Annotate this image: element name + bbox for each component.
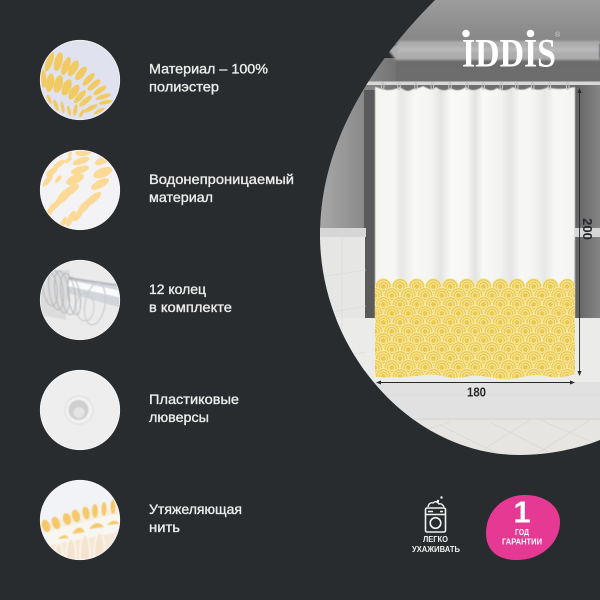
label: grommets text bbox=[149, 391, 239, 425]
icon ring bbox=[40, 370, 120, 450]
label: waterproof text: Водонепроницаемый bbox=[149, 171, 294, 187]
badge: 1 year warranty bbox=[486, 494, 560, 560]
registered mark: ® bbox=[555, 31, 561, 39]
label: easy care text: УХАЖИВАТЬ bbox=[412, 544, 460, 554]
label: material text bbox=[149, 60, 268, 94]
left wall bbox=[320, 58, 396, 240]
warranty number: 1 bbox=[513, 494, 531, 530]
photo: bathroom with curtain bbox=[320, 0, 600, 459]
logo dot bbox=[527, 30, 534, 37]
icon: plastic grommet bbox=[40, 370, 120, 450]
curtain rings bbox=[381, 82, 569, 90]
dimension: height 200: 200 bbox=[580, 218, 595, 240]
warranty text: ГАРАНТИИ bbox=[502, 538, 542, 546]
label: rings text: 12 колец bbox=[149, 281, 206, 297]
feature: material bbox=[40, 40, 268, 120]
dimension: width 180 bbox=[376, 380, 575, 400]
right wall bbox=[575, 85, 600, 318]
icon: wet fabric close-up bbox=[40, 149, 120, 230]
pink blob bbox=[486, 495, 560, 560]
middle wall bbox=[395, 58, 600, 240]
label: grommets text: Пластиковые bbox=[149, 391, 239, 407]
icon ring bbox=[40, 40, 120, 120]
feature: rings bbox=[40, 260, 232, 340]
feature: grommets bbox=[40, 370, 239, 450]
label: material text: Материал – 100% bbox=[149, 60, 268, 76]
logo dot bbox=[462, 30, 470, 37]
label: weighted thread text bbox=[149, 501, 242, 535]
dimension: height 200 bbox=[578, 88, 595, 376]
warranty text bbox=[502, 528, 542, 546]
left alcove shadow bbox=[364, 90, 376, 322]
label: waterproof text bbox=[149, 171, 294, 205]
icon ring bbox=[40, 480, 120, 560]
icon: washing machine bbox=[426, 496, 446, 532]
curtain rod bbox=[366, 82, 600, 85]
icon ring bbox=[40, 260, 120, 340]
warranty text: ГОД bbox=[515, 528, 529, 537]
icon: weighted hem bbox=[40, 480, 120, 560]
badge: easy care bbox=[412, 496, 460, 554]
label: rings text: в комплекте bbox=[149, 299, 232, 315]
logo: IDDIS: IDDIS bbox=[462, 30, 556, 76]
feature: waterproof bbox=[40, 149, 294, 230]
icon: yellow petals close-up bbox=[40, 40, 120, 120]
upper wall bbox=[396, 0, 600, 44]
curtain scallop pattern bbox=[375, 276, 575, 382]
label: weighted thread text: Утяжеляющая bbox=[149, 501, 242, 517]
crown molding bbox=[388, 41, 600, 60]
label: material text: полиэстер bbox=[149, 78, 219, 94]
label: waterproof text: материал bbox=[149, 189, 213, 205]
dimension: width 180: 180 bbox=[467, 384, 486, 400]
floor bbox=[412, 418, 600, 455]
label: grommets text: люверсы bbox=[149, 409, 209, 425]
curtain fabric bbox=[374, 86, 576, 318]
icon: rings on rod bbox=[40, 260, 122, 340]
label: weighted thread text: нить bbox=[149, 519, 180, 535]
label: easy care text bbox=[412, 534, 460, 554]
label: easy care text: ЛЕГКО bbox=[423, 534, 448, 544]
label: rings text bbox=[149, 281, 232, 315]
lower tiles bbox=[374, 382, 600, 420]
icon ring bbox=[40, 150, 120, 230]
feature: weighted thread bbox=[40, 480, 242, 560]
wainscot tiles bbox=[320, 228, 600, 382]
